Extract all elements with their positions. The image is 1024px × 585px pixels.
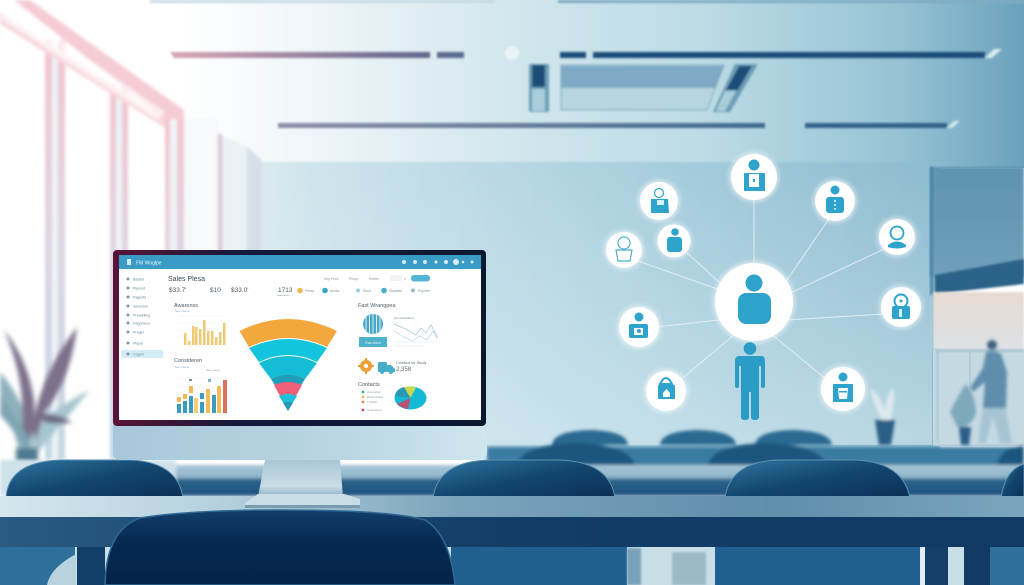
icon: central person: [738, 274, 771, 324]
key figures: $33.0': [231, 287, 249, 294]
middle row chairs: [6, 460, 1024, 498]
monitor: [113, 250, 487, 460]
panel: awareness bar chart: Awarenss: [174, 303, 198, 309]
icon: striped globe: [363, 314, 383, 334]
funnel stage: teal: [271, 374, 305, 387]
sparkline chart: Quosstawlltiors: [394, 316, 415, 320]
legend chips: Pteap: [305, 289, 314, 293]
background person: [970, 340, 1012, 443]
funnel stage: red: [274, 382, 302, 396]
icon: person with camera: [629, 312, 648, 338]
key figures: $33.7': [169, 287, 187, 294]
key figures: 1713: [278, 287, 293, 294]
top toolbar: [324, 275, 430, 282]
icon: person with buttons: [826, 186, 844, 213]
screen: [119, 255, 481, 420]
panel: awareness bar chart: Sep ottess: [175, 309, 190, 313]
lower chairs and legs behind desk: [0, 545, 1024, 585]
standing person figure: [735, 342, 765, 420]
right side room: [930, 167, 1024, 446]
sidebar navigation: Saversen: [133, 304, 148, 308]
panel: contacts pie: [358, 382, 426, 412]
top toolbar: Reefer: [369, 277, 380, 281]
pie legend: Trotioth: [367, 400, 377, 404]
funnel stage: apex: [283, 402, 293, 411]
icon: locked person: [658, 378, 675, 399]
left windows: [0, 0, 262, 460]
panel: consideration bar chart: [174, 358, 227, 413]
panel: study metric: Conduct for Study: [396, 361, 426, 365]
icon: small person: [667, 228, 682, 252]
panel: funnel insights: [358, 303, 437, 347]
legend chips: [297, 288, 431, 293]
back rows of chairs and tables: [0, 430, 1024, 496]
panel: awareness bar chart: [174, 303, 226, 345]
panel: consideration bar chart: Consideren: [174, 358, 202, 364]
background potted plant: [871, 384, 976, 445]
monitor stand: [245, 460, 360, 508]
pie chart: [394, 386, 426, 410]
sidebar navigation: Dagretnca: [133, 322, 150, 326]
sidebar navigation: Pagwrtd: [133, 296, 146, 300]
legend chips: Stuot: [363, 289, 371, 293]
icon: delivery truck: [378, 362, 395, 374]
top toolbar: v: [404, 277, 406, 281]
panel: study metric: 2,358: [396, 367, 412, 373]
icon: headset person: [888, 226, 906, 248]
pie legend: Bnohmrahle: [367, 395, 384, 399]
app header bar: [119, 255, 481, 269]
funnel chart: [240, 319, 337, 411]
left plant: [0, 327, 90, 462]
foreground chair: [105, 510, 455, 585]
icon: person with badge: [744, 160, 765, 191]
top toolbar: Sep Fmm: [324, 277, 339, 281]
air conditioning unit: [529, 64, 758, 112]
ceiling light strips: [150, 0, 1024, 128]
icon: person with apron: [833, 372, 853, 402]
icon: orange gear: [358, 358, 374, 374]
monitor chin: [113, 424, 487, 460]
connector lines: [624, 177, 901, 393]
sidebar navigation: Presdriting: [133, 314, 150, 318]
panel: consideration bar chart: Sep ottess: [175, 365, 190, 369]
app header bar: FM Wnglpe: [136, 260, 162, 266]
funnel stage: cyan lower: [259, 356, 317, 379]
panel: study metric: [358, 358, 426, 374]
button: Eas Adot: [365, 341, 382, 345]
panel: funnel insights: Fast Wrangpea: [358, 303, 396, 309]
top toolbar: Pteap: [349, 277, 358, 281]
funnel stage: light cyan: [279, 394, 297, 404]
panel: consideration bar chart: Sep ottess: [206, 368, 221, 372]
legend chips: Anutsl: [330, 289, 340, 293]
panel: contacts pie: Contacts: [358, 382, 380, 388]
customer network diagram: [604, 152, 923, 420]
sidebar navigation: Preget: [133, 330, 144, 334]
funnel stage: orange: [240, 319, 337, 347]
icon: outline padlock person: [616, 237, 632, 261]
key figures: [169, 287, 293, 296]
legend chips: Poporer: [418, 289, 431, 293]
pie legend: [362, 390, 384, 412]
white node discs: [604, 152, 923, 413]
sidebar navigation: [121, 278, 163, 358]
icon: person with headset and vest: [651, 188, 669, 213]
sidebar navigation: Cogert: [133, 352, 144, 356]
icon: person with dial: [892, 294, 910, 319]
sidebar navigation: Pteper: [133, 342, 144, 346]
key figures: $10: [210, 287, 221, 294]
monitor bezel: [113, 250, 486, 426]
sidebar navigation: Pipeset: [133, 286, 145, 290]
pie legend: Averstriod: [367, 390, 381, 394]
sidebar navigation: Basket: [133, 278, 144, 282]
funnel stage: cyan: [249, 339, 327, 362]
foreground desk: [0, 496, 1024, 547]
legend chips: Ftastden: [389, 289, 402, 293]
dashboard title: Sales Plesa: [168, 276, 205, 283]
pie legend: Coonstand: [367, 408, 382, 412]
